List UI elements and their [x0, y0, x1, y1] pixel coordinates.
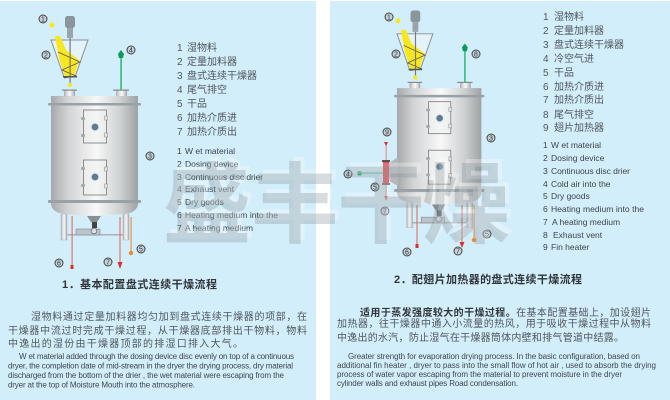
- legend: basic dryer Chinese: 加热介质进: [187, 111, 237, 124]
- arrow: heating medium in: [70, 216, 74, 269]
- text: fin heater configuration Chinese: 中逸出的水汽，防止湿气在干燥器筒体内壁和排气管道中结露。: [337, 331, 624, 344]
- text: fin heater configuration English: Greater strength for evaporation drying process. In the basic configuration, based on: [348, 352, 640, 361]
- arrow: heating medium out: [460, 205, 464, 248]
- callouts: fin heater dryer numbers: 7: [456, 248, 460, 256]
- legend: fin heater dryer English: Continuous disc drier: [551, 166, 630, 176]
- text: fin heater configuration Chinese: 适用于蒸发强度较大的干燥过程。在基本配置基础上，加设翅片: [360, 306, 651, 319]
- legend: fin heater dryer Chinese: 冷空气进: [554, 52, 594, 65]
- diagram: basic dryer: [48, 16, 141, 240]
- legend: basic dryer English: Continuous disc drier: [185, 172, 263, 182]
- watermark: [163, 152, 514, 255]
- legend: fin heater dryer Chinese: [543, 10, 624, 134]
- legend: basic dryer Chinese: 定量加料器: [187, 55, 237, 68]
- panel: basic configuration: [0, 1, 316, 400]
- legend: fin heater dryer English: 7: [543, 217, 548, 227]
- text: basic configuration Chinese: [8, 310, 307, 350]
- legend: basic dryer English: [177, 146, 278, 233]
- legend: fin heater dryer Chinese: 2: [543, 26, 549, 37]
- legend: fin heater dryer English: 2: [543, 153, 548, 163]
- legend: basic dryer Chinese: 尾气排空: [187, 83, 227, 96]
- callouts: fin heater dryer numbers: 3: [489, 136, 493, 142]
- text: basic configuration Chinese: 中逸出的湿份由干燥器顶部的排湿口排入大气。: [8, 337, 243, 350]
- legend: basic dryer English: 2: [177, 159, 182, 169]
- legend: basic dryer Chinese: 4: [177, 85, 183, 96]
- legend: basic dryer English: Heating medium into the: [185, 210, 278, 220]
- legend: fin heater dryer Chinese: 6: [543, 82, 549, 93]
- legend: fin heater dryer English: Fin heater: [551, 242, 589, 252]
- legend: fin heater dryer English: 1: [543, 140, 548, 150]
- text: basic configuration Chinese: 干燥器中流过时完成干燥过程，从干燥器底部排出干物料，物料: [8, 324, 307, 337]
- callouts: fin heater dryer numbers: 1: [387, 14, 391, 22]
- arrow: heating medium out: [118, 217, 122, 269]
- legend: basic dryer English: A heating medium: [185, 223, 253, 233]
- legend: basic dryer English: 4: [177, 184, 182, 194]
- legend: basic dryer English: W et material: [185, 146, 235, 156]
- legend: fin heater dryer English: Cold air into the: [551, 179, 611, 189]
- panel: fin heater configuration: [330, 1, 670, 400]
- text: basic configuration English: dryer at the top of Moisture Mouth into the atmosphere.: [8, 380, 195, 390]
- legend: fin heater dryer Chinese: 尾气排空: [554, 108, 594, 121]
- legend: basic dryer Chinese: 加热介质出: [187, 125, 237, 138]
- callouts: fin heater dryer numbers: 5: [373, 184, 377, 192]
- watermark: 盛: [163, 156, 251, 255]
- text: basic configuration Chinese: 湿物料通过定量加料器均匀加到盘式连续干燥器的项部，在: [31, 310, 307, 323]
- callouts: basic dryer numbers: 7: [106, 260, 110, 266]
- legend: basic dryer English: 6: [177, 210, 182, 220]
- callouts: basic dryer numbers: 6: [57, 260, 61, 268]
- legend: basic dryer English: 5: [177, 197, 182, 207]
- legend: fin heater dryer Chinese: 9: [543, 123, 549, 134]
- legend: fin heater dryer English: W et material: [551, 140, 601, 150]
- legend: fin heater dryer Chinese: 定量加料器: [554, 24, 604, 37]
- legend: basic dryer English: 1: [177, 146, 182, 156]
- text: basic configuration English: W et material added through the dosing device disc evenly on top of a continuous: [19, 352, 294, 361]
- legend: fin heater dryer English: A heating medium: [552, 217, 620, 227]
- legend: fin heater dryer English: 9: [543, 242, 548, 252]
- callouts: fin heater dryer numbers: 8: [474, 52, 478, 58]
- legend: basic dryer Chinese: 7: [177, 127, 183, 138]
- callouts: fin heater dryer numbers: 5: [485, 232, 489, 238]
- legend: basic dryer Chinese: 2: [177, 57, 183, 68]
- legend: fin heater dryer Chinese: 加热介质出: [554, 93, 604, 106]
- legend: fin heater dryer Chinese: 7: [543, 95, 549, 106]
- legend: fin heater dryer Chinese: 盘式连续干燥器: [554, 38, 624, 51]
- callouts: basic dryer numbers: 3: [148, 154, 152, 160]
- text: basic configuration English: dryer, the completion date of mid-stream in the dryer the drying process, dry material: [8, 362, 293, 370]
- callouts: fin heater dryer numbers: 4: [346, 172, 350, 178]
- legend: basic dryer English: Dosing device: [185, 159, 239, 169]
- text: fin heater configuration Chinese: 加热器，往干燥器中通入小流量的热风，用于吸收干燥过程中从物料: [337, 317, 651, 330]
- watermark: 干: [337, 156, 425, 255]
- legend: fin heater dryer English: 3: [543, 166, 548, 176]
- legend: basic dryer Chinese: 湿物料: [187, 41, 217, 54]
- callouts: basic dryer numbers: 5: [139, 246, 143, 254]
- legend: fin heater dryer Chinese: 翅片加热器: [554, 121, 604, 134]
- watermark: 丰: [251, 156, 339, 255]
- arrow: dry goods: [129, 217, 133, 255]
- callouts: basic dryer numbers: [39, 15, 154, 268]
- legend: fin heater dryer English: 8: [543, 230, 548, 240]
- legend: fin heater dryer Chinese: 3: [543, 40, 549, 51]
- legend: fin heater dryer Chinese: 干品: [554, 67, 574, 79]
- legend: fin heater dryer English: 4: [543, 179, 548, 189]
- legend: fin heater dryer Chinese: 1: [543, 12, 549, 23]
- text: fin heater configuration English: additional fin heater , dryer to pass into the small flow of hot air , used to absorb the drying: [337, 361, 656, 370]
- text: fin heater configuration English: [337, 352, 656, 388]
- legend: fin heater dryer English: Dosing device: [551, 153, 605, 163]
- callouts: fin heater dryer numbers: 2: [394, 52, 398, 58]
- watermark: 干: [341, 152, 429, 251]
- diagram: fin heater dryer: [394, 11, 484, 228]
- legend: fin heater dryer Chinese: 8: [543, 110, 549, 121]
- heading: basic configuration: 1．基本配置盘式连续干燥流程: [62, 277, 217, 291]
- legend: basic dryer Chinese: 盘式连续干燥器: [187, 69, 257, 82]
- legend: fin heater dryer English: Exhaust vent: [553, 230, 603, 240]
- arrow: dry goods: [472, 205, 476, 242]
- legend: basic dryer Chinese: 干品: [187, 98, 207, 110]
- fin heater: [382, 142, 398, 201]
- callouts: fin heater dryer numbers: 7: [383, 208, 387, 216]
- text: basic configuration English: [8, 352, 294, 390]
- arrow: cold air in: [358, 171, 383, 176]
- legend: fin heater dryer English: 6: [543, 204, 548, 214]
- text: fin heater configuration Chinese: [337, 306, 651, 344]
- text: fin heater configuration English: cylinder walls and exhaust pipes Road condensation.: [337, 379, 518, 388]
- legend: basic dryer Chinese: [177, 41, 257, 138]
- legend: basic dryer Chinese: 5: [177, 99, 183, 110]
- heading: fin heater configuration: 2．配翅片加热器的盘式连续干燥流程: [394, 272, 582, 286]
- watermark: 丰: [255, 152, 343, 251]
- legend: basic dryer Chinese: 3: [177, 71, 183, 82]
- callouts: fin heater dryer numbers: [344, 13, 495, 256]
- legend: fin heater dryer English: Heating medium into the: [551, 204, 644, 214]
- arrow: heating medium in: [416, 205, 418, 248]
- callouts: basic dryer numbers: 1: [41, 16, 45, 24]
- legend: basic dryer Chinese: 6: [177, 113, 183, 124]
- watermark: 燥: [426, 152, 514, 251]
- legend: basic dryer Chinese: 1: [177, 43, 183, 54]
- watermark: 燥: [422, 156, 510, 255]
- text: basic configuration English: discharged from the bottom of the drier , the wet material were escaping from the: [8, 371, 285, 380]
- text: fin heater configuration English: process of water vapor escaping from the material to prevent moisture in the dryer: [337, 370, 622, 379]
- legend: fin heater dryer Chinese: 加热介质进: [554, 80, 604, 93]
- callouts: fin heater dryer numbers: 9: [385, 130, 389, 136]
- legend: fin heater dryer Chinese: 4: [543, 54, 549, 65]
- watermark: 盛: [167, 152, 255, 251]
- legend: basic dryer English: 3: [177, 172, 182, 182]
- legend: fin heater dryer Chinese: 5: [543, 68, 549, 79]
- legend: basic dryer English: Exhaust vent: [185, 184, 235, 194]
- callouts: basic dryer numbers: 4: [129, 48, 133, 54]
- legend: basic dryer English: 7: [177, 223, 182, 233]
- legend: fin heater dryer Chinese: 湿物料: [554, 10, 584, 23]
- callouts: basic dryer numbers: 2: [44, 52, 48, 60]
- legend: fin heater dryer English: Dry goods: [551, 191, 590, 201]
- legend: fin heater dryer English: 5: [543, 191, 548, 201]
- icon: wet material feed dot: [396, 18, 400, 24]
- callouts: fin heater dryer numbers: 6: [405, 250, 409, 256]
- icon: wet material feed dot: [50, 22, 54, 28]
- legend: fin heater dryer English: [543, 140, 644, 252]
- legend: basic dryer English: Dry goods: [185, 197, 224, 207]
